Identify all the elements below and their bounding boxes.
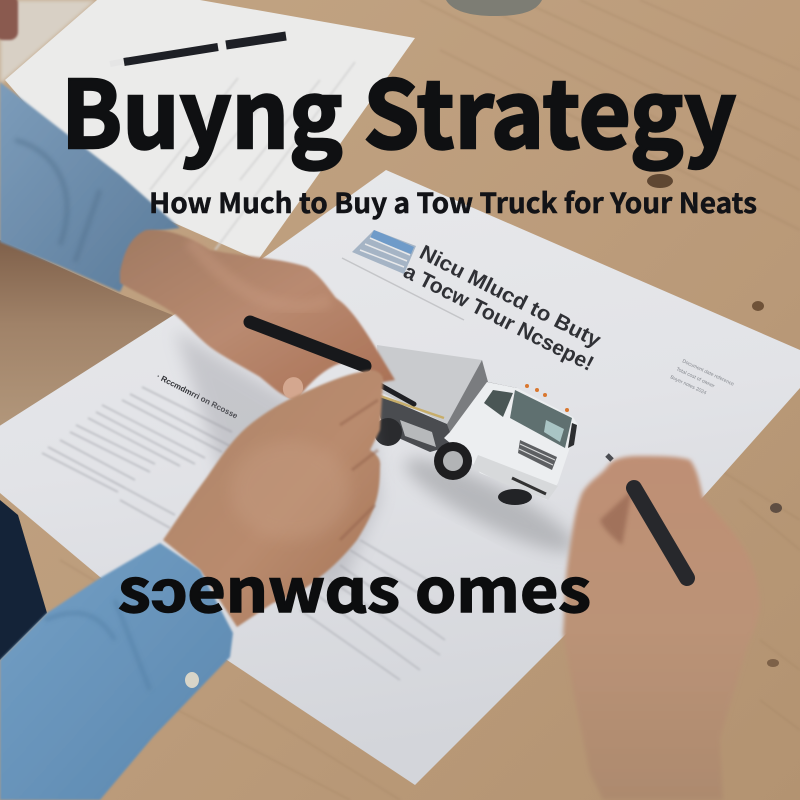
main document sheet (0, 170, 800, 785)
pen in right hand (607, 455, 687, 578)
sheet heading: a Tocw Tour Ncsepe! (400, 260, 597, 376)
right hand with pen (563, 455, 760, 800)
truck cab (444, 382, 578, 500)
subtitle: How Much to Buy a Tow Truck for Your Neats (149, 182, 757, 222)
small side note: Total cost of owner (675, 366, 716, 390)
lower left hand (163, 370, 383, 627)
back document sheet (5, 0, 415, 260)
pen in upper hand (250, 322, 414, 404)
side window (484, 390, 513, 417)
lower left sleeve (0, 543, 233, 800)
small side note: Document date reference (681, 358, 735, 388)
thumb nail (280, 374, 306, 402)
front wheel (434, 442, 472, 480)
truck cargo box (377, 345, 482, 424)
pale fabric at top left corner (0, 0, 97, 84)
upper hand holding pen (120, 230, 414, 404)
windshield (510, 390, 572, 448)
sheet heading: Nicu Mlucd to Buty (416, 241, 605, 352)
lower caption: sɔenwɑs omes (118, 543, 591, 630)
small side note (669, 358, 735, 396)
left text block lines (42, 387, 445, 680)
small side note: Buyer notes 2024 (669, 374, 707, 396)
grille (518, 440, 557, 470)
cuff button (185, 672, 199, 688)
upper left sleeve (0, 82, 180, 292)
far front wheel (498, 489, 532, 505)
back sheet text lines (150, 62, 355, 250)
left text block heading: · Rccmdmrri on Rcosse (155, 372, 240, 421)
truck (372, 345, 584, 566)
title: Buyng Strategy (61, 40, 736, 175)
cab lights (525, 384, 569, 412)
dark wood shadow under arm (0, 240, 175, 428)
ground shadow (396, 444, 584, 566)
chassis (372, 392, 455, 452)
dark trousers at left edge (0, 500, 47, 660)
mug at top edge (446, 0, 542, 16)
shadow under hands on paper (175, 330, 380, 590)
mini chart icon on sheet (352, 230, 416, 274)
pen on back sheet (110, 36, 286, 64)
bumper (472, 455, 558, 500)
knuckle shading (190, 240, 330, 306)
